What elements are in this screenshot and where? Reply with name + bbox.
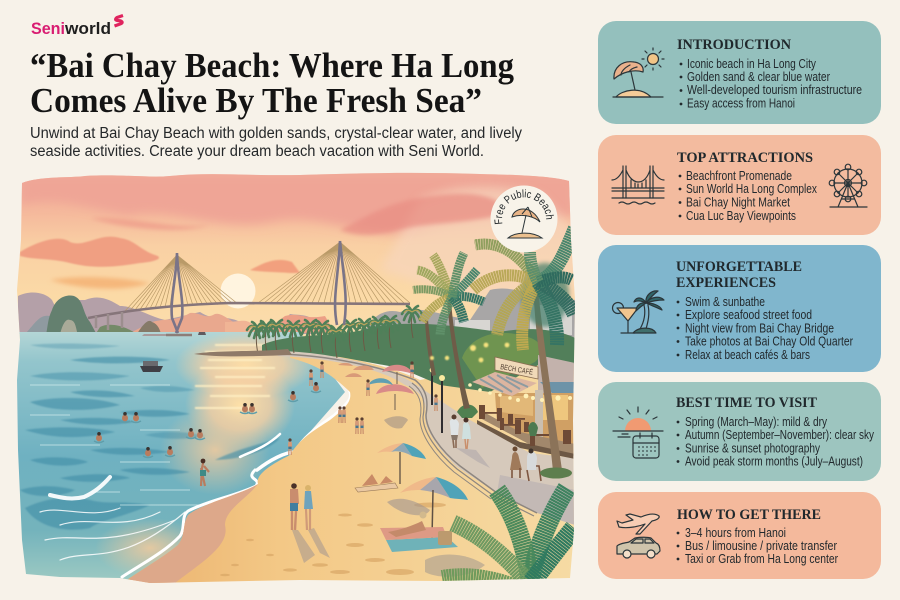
yellow garden lights	[430, 343, 509, 362]
waves and surf	[40, 385, 351, 577]
panel: unforgettable experiences	[598, 245, 881, 372]
icon: beach umbrella and sun	[613, 48, 664, 97]
heading: top attractions: TOP ATTRACTIONS	[677, 150, 813, 166]
spit and boats	[140, 332, 292, 372]
illustration: watercolor beach scene	[10, 170, 580, 590]
light ripples on the water	[30, 385, 200, 505]
sun	[220, 274, 256, 308]
right palm tree trunk	[533, 280, 562, 471]
list: introduction facts: Easy access from Hanoi	[687, 96, 795, 110]
heading: unforgettable experiences: UNFORGETTABLE	[676, 259, 802, 275]
list: experiences: Swim & sunbathe	[685, 295, 765, 309]
list: introduction facts: Golden sand & clear blue water	[687, 70, 830, 84]
sun reflection	[95, 331, 315, 578]
promenade shadows	[497, 475, 575, 525]
middle palm tree	[413, 253, 484, 409]
right palm crown	[473, 228, 575, 350]
list: experiences: Take photos at Bai Chay Old Quarter	[685, 334, 853, 348]
list: best time: Sunrise & sunset photography	[685, 442, 821, 456]
heading: best time to visit: BEST TIME TO VISIT	[676, 395, 817, 411]
foreground palm fronds	[442, 488, 574, 590]
title	[30, 47, 514, 120]
beach café	[457, 355, 575, 459]
beach café: BECH CAFÉ	[500, 362, 534, 377]
row of small palms	[247, 306, 422, 358]
promenade steps	[278, 354, 537, 516]
heading: how to get there: HOW TO GET THERE	[677, 507, 821, 523]
panel: how to get there	[598, 492, 881, 579]
title: “Bai Chay Beach: Where Ha Long	[30, 47, 514, 85]
list: top attractions: Sun World Ha Long Complex	[686, 182, 818, 196]
green karst rocks	[46, 296, 161, 335]
badge: Free Public Beach: Free Public Beach	[494, 189, 554, 224]
logo: Seniworld: world	[64, 20, 111, 38]
list: top attractions: Bai Chay Night Market	[686, 196, 790, 210]
icon: car	[617, 537, 660, 558]
heading: unforgettable experiences: EXPERIENCES	[676, 275, 776, 291]
icon: ferris wheel	[829, 164, 867, 207]
subtitle	[30, 125, 522, 160]
beach sand	[120, 350, 575, 585]
icon: suspension bridge	[612, 166, 664, 204]
list: how to get there: 3–4 hours from Hanoi	[685, 526, 786, 540]
subtitle: seaside activities. Create your dream beach vacation with Seni World.	[30, 143, 484, 160]
list: best time: Avoid peak storm months (July–August)	[685, 454, 863, 468]
far mountains	[18, 293, 335, 334]
beach umbrellas and sunbathers	[338, 363, 485, 577]
beachfront road	[278, 351, 575, 525]
list: how to get there: Taxi or Grab from Ha Long center	[685, 552, 838, 566]
cable-stayed bridge	[88, 241, 410, 335]
promenade walkers and lamp posts	[430, 368, 572, 481]
distant hills and resort buildings	[360, 289, 575, 350]
heading: unforgettable experiences	[676, 259, 802, 291]
footprints and sand shading	[220, 502, 446, 576]
panel: best time to visit	[598, 382, 881, 481]
panel: introduction	[598, 21, 881, 124]
list: introduction facts: Well-developed tourism infrastructure	[687, 83, 862, 97]
panel: top attractions	[598, 135, 881, 235]
logo: Seniworld	[31, 16, 123, 38]
icon: airplane	[617, 514, 659, 534]
list: top attractions: Cua Luc Bay Viewpoints	[686, 209, 796, 223]
sea	[10, 332, 345, 580]
couple walking on the beach	[290, 483, 330, 563]
subtitle: Unwind at Bai Chay Beach with golden sands, crystal-clear water, and lively	[30, 125, 522, 142]
sky with sunset clouds	[10, 170, 580, 340]
list: experiences: Explore seafood street food	[685, 308, 812, 322]
water streaks	[20, 343, 280, 530]
badge: Free Public Beach	[490, 186, 558, 252]
icon: sunrise and calendar	[613, 407, 663, 458]
wet sand	[124, 484, 258, 583]
list: top attractions	[679, 169, 818, 223]
list: how to get there	[677, 526, 838, 566]
list: how to get there: Bus / limousine / private transfer	[685, 539, 837, 553]
list: top attractions: Beachfront Promenade	[686, 169, 792, 183]
list: experiences: Night view from Bai Chay Bridge	[685, 322, 834, 336]
list: introduction facts: Iconic beach in Ha Long City	[687, 57, 817, 71]
tree line	[262, 324, 575, 392]
list: introduction facts	[680, 57, 862, 110]
people on the sand	[288, 361, 438, 455]
list: best time: Spring (March–May): mild & dry	[685, 415, 828, 429]
icon: cocktail and palm	[612, 291, 664, 333]
heading: introduction: INTRODUCTION	[677, 37, 791, 53]
title: Comes Alive By The Fresh Sea”	[30, 82, 482, 120]
list: best time	[677, 415, 875, 468]
list: experiences: Relax at beach cafés & bars	[685, 348, 810, 362]
swimmers in the sea	[94, 382, 321, 486]
list: experiences	[677, 295, 853, 362]
logo: Seniworld: Seni	[31, 20, 65, 38]
